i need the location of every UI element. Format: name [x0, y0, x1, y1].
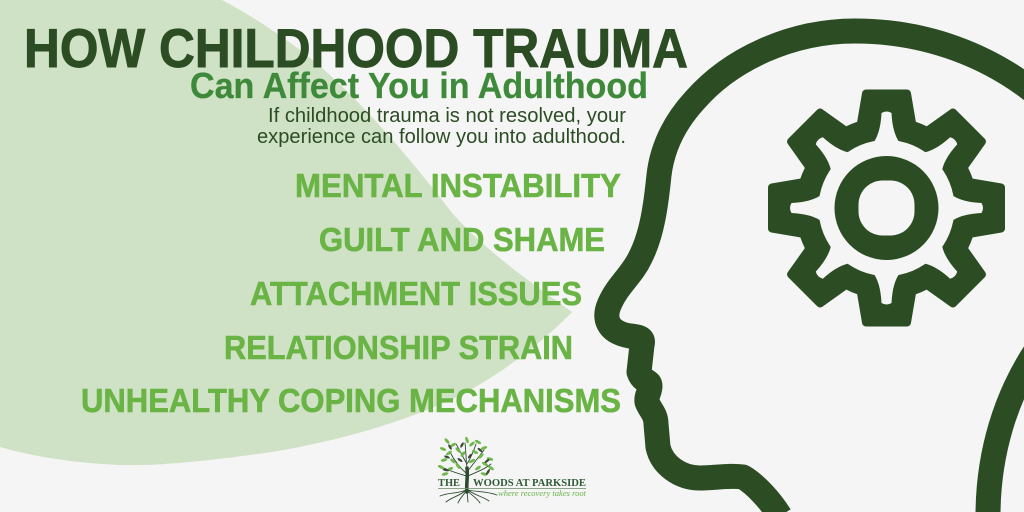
intro text: If childhood trauma is not resolved, your — [268, 104, 626, 127]
tree branches and roots — [440, 443, 497, 503]
logo wordmark: THE — [438, 478, 460, 489]
intro text: experience can follow you into adulthood. — [257, 125, 626, 148]
intro text — [257, 104, 626, 148]
dark leaves — [442, 442, 491, 476]
background blob — [0, 0, 572, 465]
list of effects: MENTAL INSTABILITY — [295, 167, 621, 204]
icon: gear — [772, 94, 1001, 322]
icon: head outline — [607, 31, 1024, 512]
list of effects — [81, 167, 621, 419]
title: HOW CHILDHOOD TRAUMA — [24, 17, 688, 79]
list of effects: ATTACHMENT ISSUES — [250, 275, 582, 312]
logo tagline: where recovery takes root — [498, 488, 587, 498]
list of effects: GUILT AND SHAME — [319, 221, 605, 258]
list of effects: UNHEALTHY COPING MECHANISMS — [81, 382, 621, 419]
list of effects: RELATIONSHIP STRAIN — [224, 329, 573, 366]
tree leaves — [437, 436, 495, 476]
logo wordmark: WOODS AT PARKSIDE — [473, 478, 586, 489]
subtitle: Can Affect You in Adulthood — [190, 65, 648, 106]
logo — [437, 436, 587, 503]
